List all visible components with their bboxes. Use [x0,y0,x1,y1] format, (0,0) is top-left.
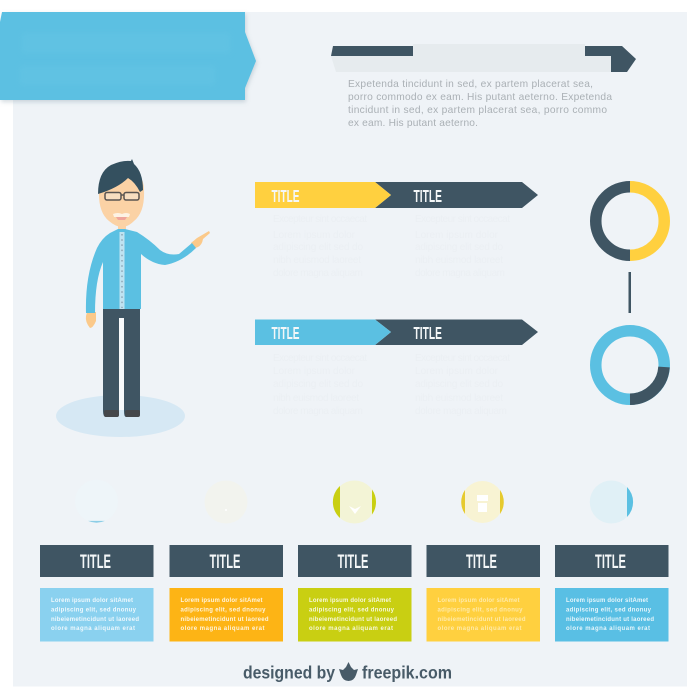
yellow title arrow pair [255,182,538,208]
blue title arrow pair: TITLE [414,323,442,343]
card 2 body: Lorem ipsum dolor sitAmet [180,598,262,604]
neck [118,222,126,232]
top banner arrow [331,44,636,72]
trousers and shoes [103,308,140,417]
right hand pointing [191,231,210,249]
faint text columns under blue arrows: adipiscing elit sed do [415,379,503,390]
ribbon heading [0,12,256,100]
faint text columns under blue arrows: adipiscing elit sed do [273,379,363,390]
card 5 body [555,588,668,642]
card 3 body: adipiscing elit, sed dnonuy [309,608,395,614]
faint text columns under yellow arrows: dolore magna aliquam [415,268,505,279]
faint text columns under blue arrows: dolore magna aliquam [415,406,507,417]
footer credit: designed by [243,662,335,682]
faint text columns under yellow arrows: Excepteur sint occaecat [273,214,367,225]
card 2 title bar: TITLE [210,551,240,573]
card 4 body [426,588,540,642]
left hand [86,312,96,328]
floor shadow [56,395,185,437]
icon: crown logo [339,662,358,681]
card 5 body: adipiscing elit, sed dnonuy [566,608,652,614]
intro paragraph [348,79,612,129]
card 5 body: Lorem ipsum dolor sitAmet [566,598,648,604]
faint text columns under yellow arrows: nibh euismod laoreet [273,255,361,266]
card 4 body: olore magna aliquam erat [438,626,522,632]
card 5 [555,545,668,642]
card 2 body: nibeiemetincidunt ut laoreed [180,617,269,623]
blue title arrow pair [255,320,538,345]
intro paragraph: ex eam. His putant aeterno. [348,118,478,129]
character illustration [56,159,210,437]
glasses [105,192,139,200]
card 1 body: nibeiemetincidunt ut laoreed [51,617,139,623]
card 3 body [298,588,412,642]
card 2 [170,545,283,642]
faint text columns under blue arrows: Excepteur sint occaecat [273,353,367,364]
card 4 body: adipiscing elit, sed dnonuy [438,608,523,614]
icon circle 5 [590,480,633,524]
card 2 body: olore magna aliquam erat [180,626,264,632]
card 3 [298,545,412,642]
intro paragraph: Expetenda tincidunt in sed, ex partem placerat sea, [348,79,593,90]
faint text columns under yellow arrows: nibh euismod laoreet [415,255,503,266]
card 1 title bar: TITLE [80,551,111,573]
faint text columns under yellow arrows: Lorem ipsum dolor [415,230,499,241]
faint text columns under yellow arrows: adipiscing elit sed do [415,242,503,253]
card 4 body: Lorem ipsum dolor sitAmet [438,598,520,604]
shirt [86,229,196,313]
footer credit [243,662,452,682]
mouth [113,213,130,220]
footer credit: freepik.com [362,662,452,682]
card 3 body: Lorem ipsum dolor sitAmet [309,598,391,604]
faint text columns under blue arrows: Excepteur sint occaecat [415,353,510,364]
faint text columns under yellow arrows: adipiscing elit sed do [273,242,363,253]
face [99,170,144,227]
faint text columns under blue arrows: Lorem ipsum dolor [415,366,499,377]
shirt placket [120,232,124,309]
card 2 body: adipiscing elit, sed dnonuy [180,608,266,614]
card 5 title bar: TITLE [595,551,626,573]
card 3 title bar: TITLE [338,551,368,573]
card 4 title bar: TITLE [466,551,497,573]
hair [98,159,143,194]
yellow title arrow pair: TITLE [414,186,442,206]
yellow title arrow pair: TITLE [272,186,300,206]
donut chart: yellow [596,187,664,255]
faint text columns under yellow arrows [273,214,510,279]
card 1 body [40,588,154,642]
card 5 body: olore magna aliquam erat [566,626,650,632]
card 2 body [170,588,283,642]
card 4 body: nibeiemetincidunt ut laoreed [438,617,526,623]
card 1 body: Lorem ipsum dolor sitAmet [51,598,133,604]
icon circle 2 [204,480,248,524]
blue title arrow pair: TITLE [272,323,300,343]
card 1 body: adipiscing elit, sed dnonuy [51,608,137,614]
intro paragraph: porro commodo ex eam. His putant aeterno. Expetenda [348,92,612,103]
faint text columns under blue arrows: Lorem ipsum dolor [273,366,356,377]
donut chart: blue [596,331,664,399]
icon circle 3 [333,480,376,524]
faint text columns under blue arrows [273,353,510,417]
faint text columns under yellow arrows: Lorem ipsum dolor [273,230,356,241]
faint text columns under yellow arrows: dolore magna aliquam [273,268,363,279]
icon circle 4 [461,481,504,523]
card 3 body: olore magna aliquam erat [309,626,393,632]
card 1 body: olore magna aliquam erat [51,626,135,632]
faint text columns under blue arrows: nibh euismod laoreet [273,393,359,404]
connector line [628,272,631,313]
card 1 [40,545,154,642]
intro paragraph: tincidunt in sed, ex partem placerat sea, porro commo [348,105,607,116]
faint text columns under yellow arrows: Excepteur sint occaecat [415,214,510,225]
card 4 [426,545,540,642]
faint text columns under blue arrows: dolore magna aliquam [273,406,363,417]
card 3 body: nibeiemetincidunt ut laoreed [309,617,397,623]
card 5 body: nibeiemetincidunt ut laoreed [566,617,654,623]
faint text columns under blue arrows: nibh euismod laoreet [415,393,503,404]
icon circle 1 [75,480,118,523]
